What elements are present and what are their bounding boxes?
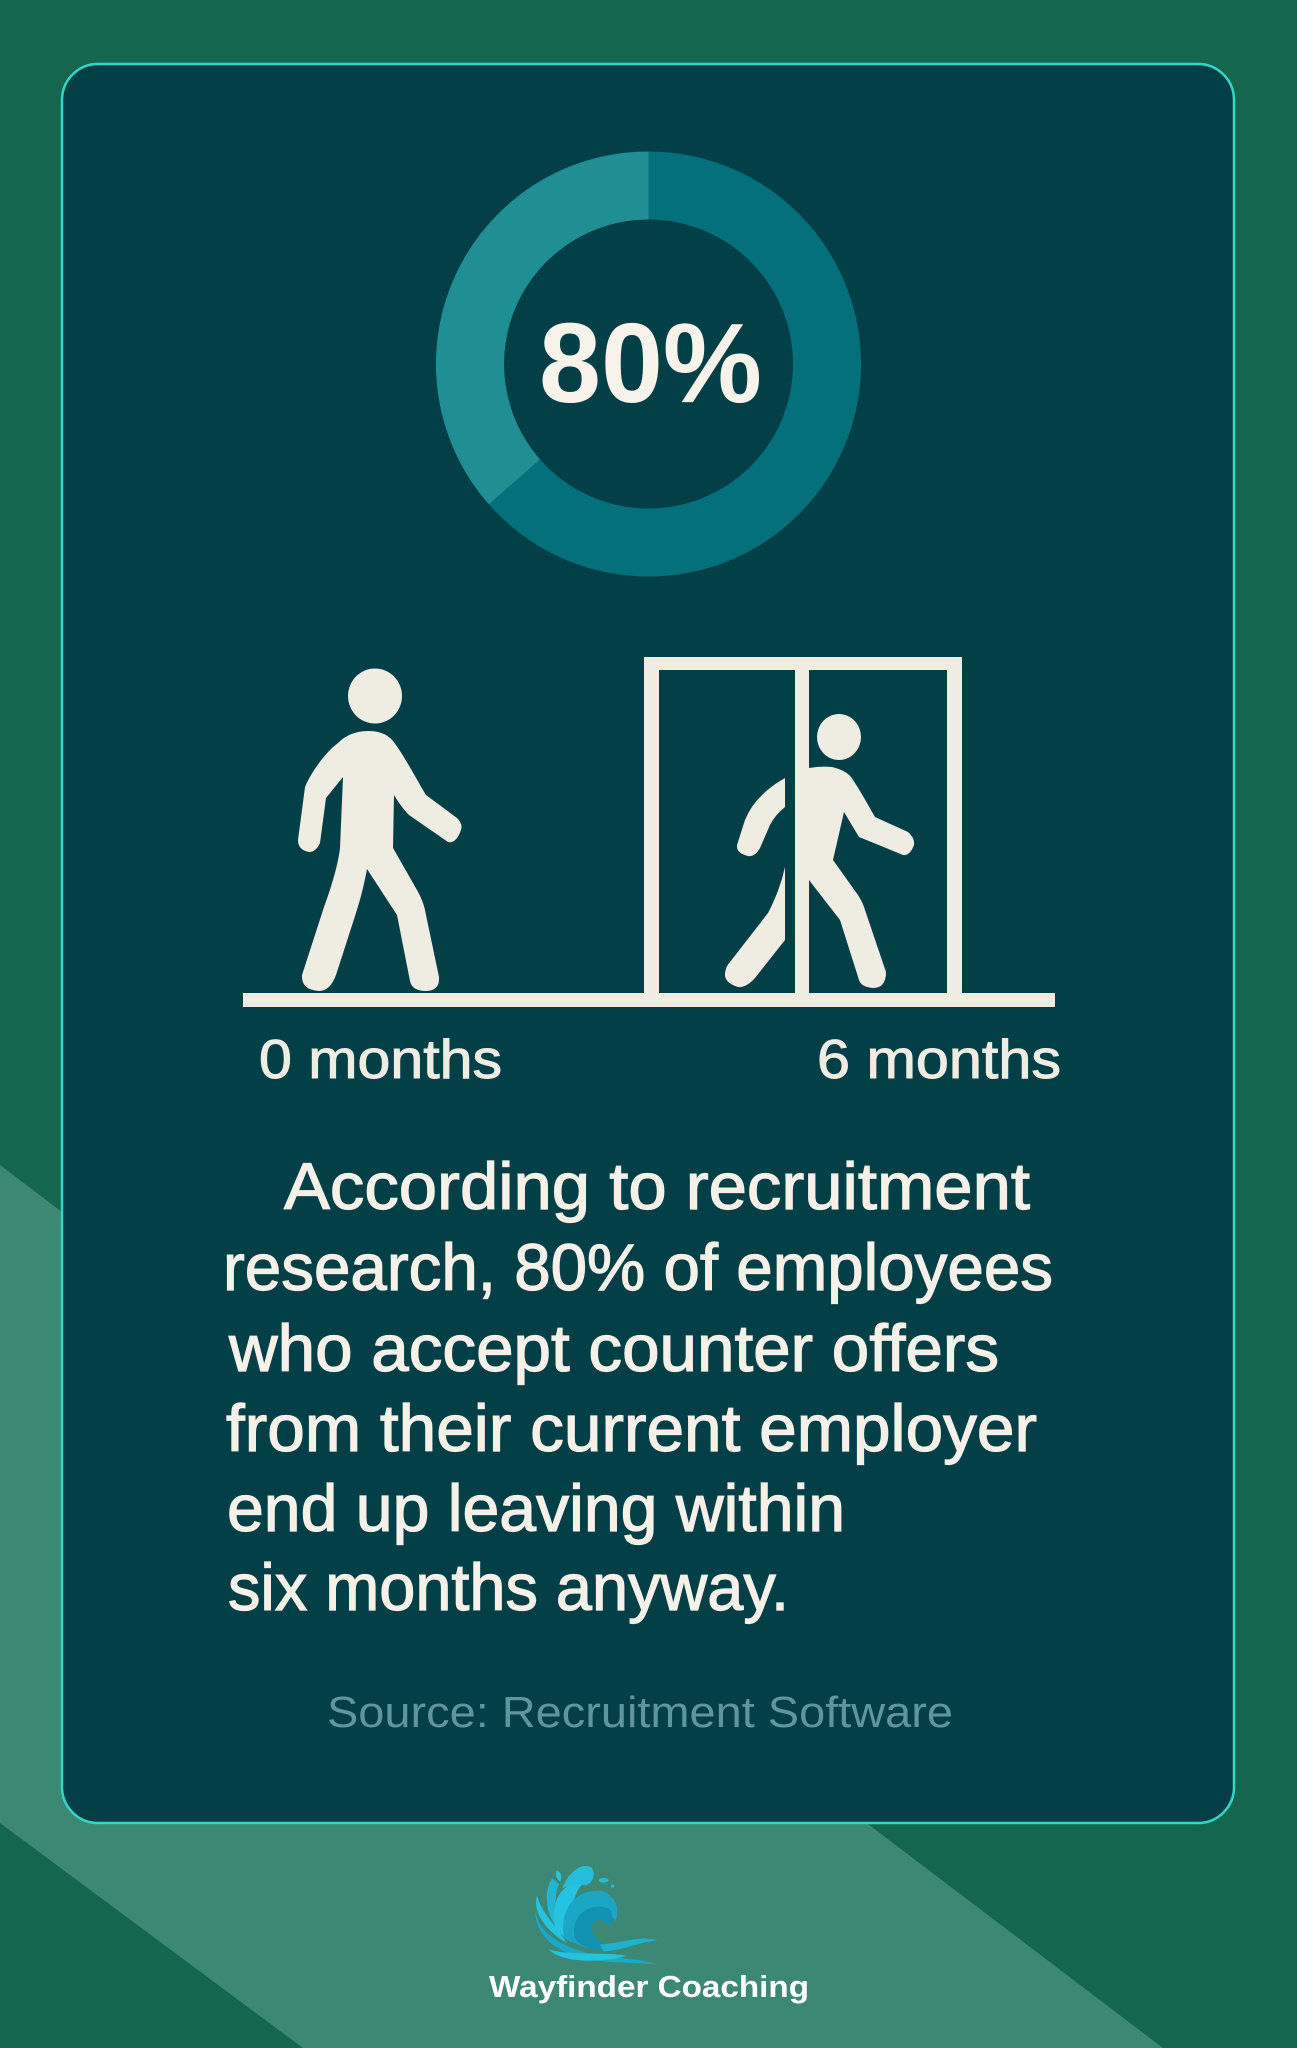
source line: Source: Recruitment Software	[327, 1688, 953, 1737]
label: 6 months: 6 months	[817, 1028, 1061, 1090]
icon: wave	[535, 1866, 658, 1964]
text block: research statement: end up leaving within	[227, 1471, 845, 1545]
text block: research statement: According to recruitment	[284, 1149, 1030, 1223]
logo wordmark: Wayfinder Coaching	[489, 1969, 809, 2004]
icon: person walking through door at 6 months	[725, 714, 914, 988]
donut ring: remaining dark segment	[470, 186, 827, 542]
diagonal light band	[0, 1165, 1163, 2048]
text block: research statement: six months anyway.	[228, 1550, 789, 1624]
text block: research statement: research, 80% of employees	[223, 1230, 1053, 1304]
panel: main card	[62, 64, 1234, 1823]
donut ring: light segment	[470, 186, 648, 482]
text block: research statement: from their current employer	[226, 1391, 1037, 1465]
text block: research statement	[223, 1149, 1053, 1624]
label: 0 months: 0 months	[259, 1028, 502, 1090]
donut value: 80%	[539, 300, 762, 426]
donut chart: 80%	[470, 186, 827, 542]
text block: research statement: who accept counter offers	[228, 1311, 999, 1385]
logo: Wayfinder Coaching	[489, 1866, 809, 2004]
icon: door frame and ground line	[243, 657, 1055, 1007]
icon: person walking at 0 months	[298, 668, 462, 991]
